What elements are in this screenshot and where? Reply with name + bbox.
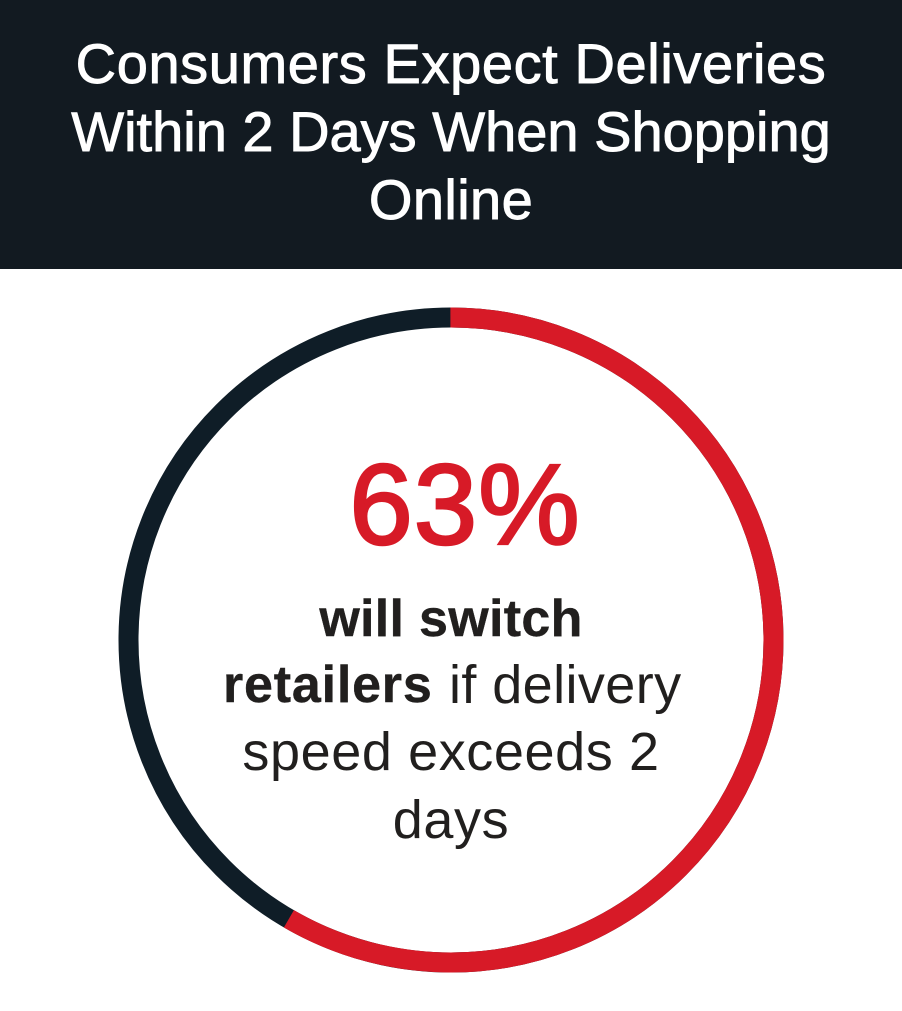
line: will switch: will switch <box>319 590 583 648</box>
line: retailers if delivery: if delivery <box>449 655 681 715</box>
description text <box>223 590 681 850</box>
line: retailers if delivery <box>223 655 681 715</box>
line: retailers if delivery: retailers <box>223 656 433 714</box>
line: days: days <box>393 790 509 850</box>
title line 3: Online <box>369 168 533 231</box>
title banner <box>0 0 902 269</box>
line: speed exceeds 2: speed exceeds 2 <box>242 722 660 782</box>
title line 1: Consumers Expect Deliveries <box>76 32 826 95</box>
big statistic: 63% <box>349 442 581 569</box>
title line 2: Within 2 Days When Shopping <box>71 100 831 163</box>
